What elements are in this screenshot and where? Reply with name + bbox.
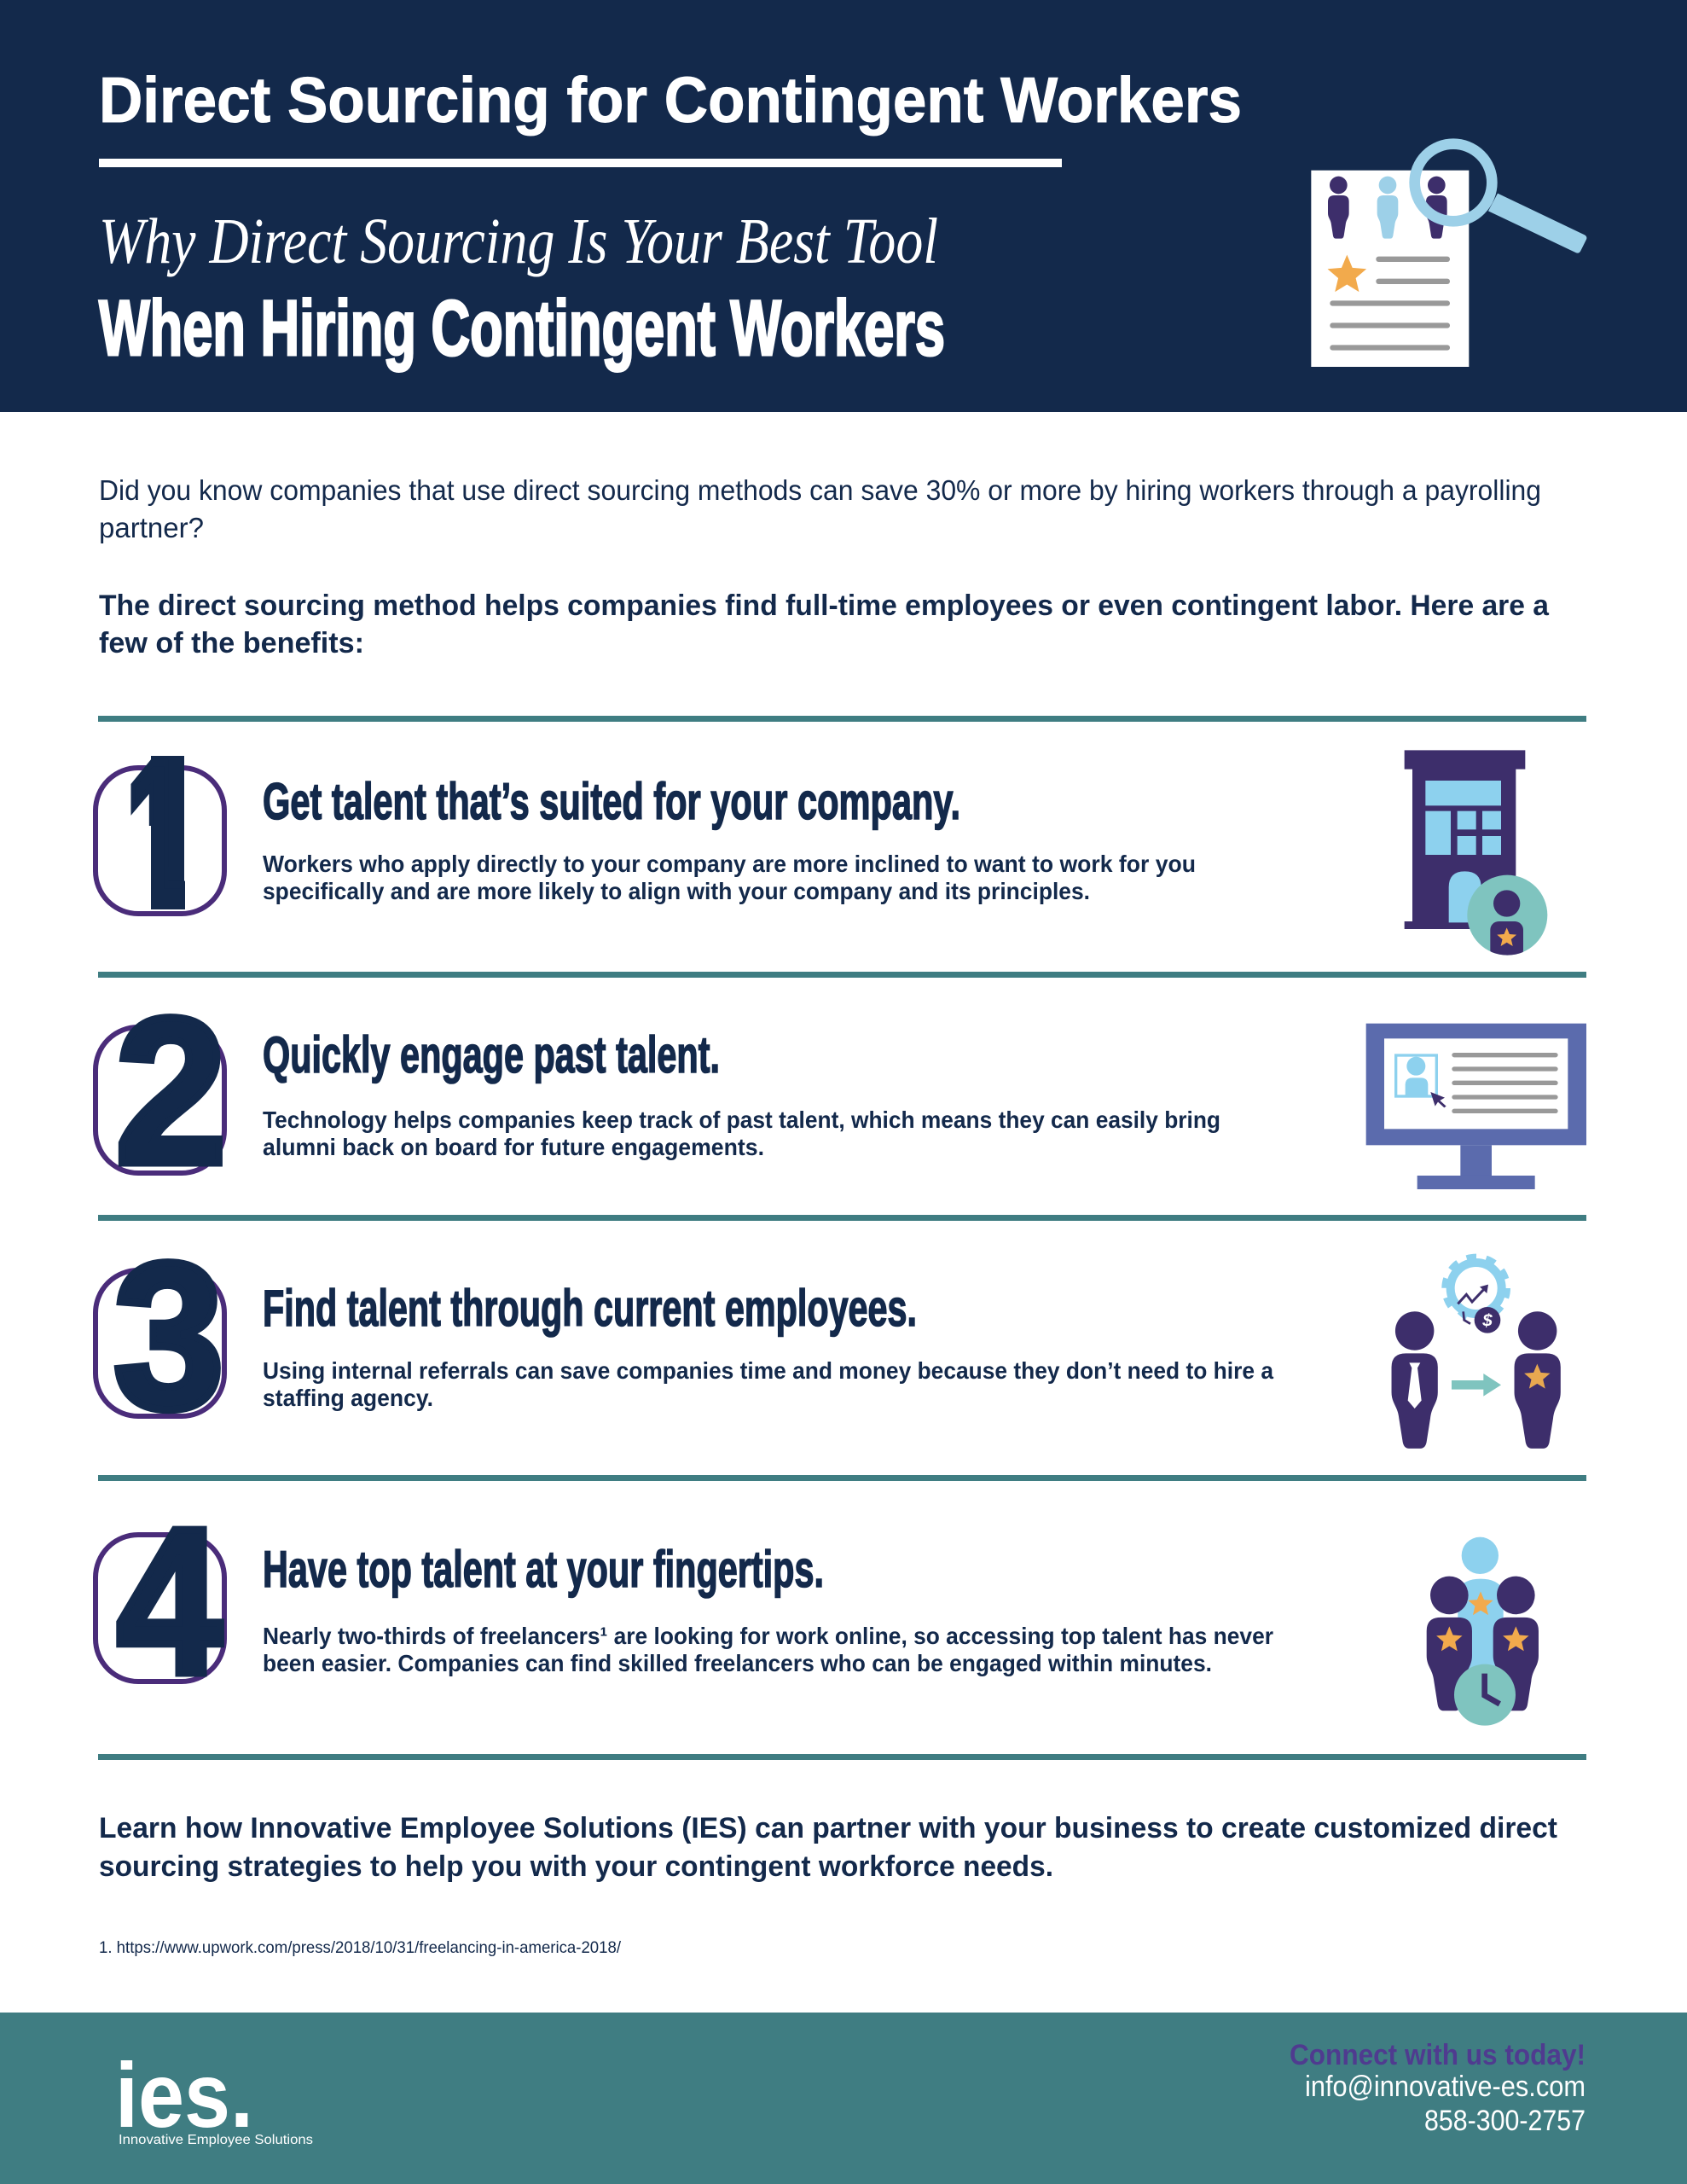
bold lead-in text: few of the benefits: — [99, 627, 364, 659]
intro text: partner? — [99, 512, 204, 543]
heading 2: Quickly engage past talent. — [263, 1026, 720, 1083]
logo: ies: ies. — [115, 2043, 253, 2146]
footnote: 1. https://www.upwork.com/press/2018/10/31/freelancing-in-america-2018/ — [99, 1939, 622, 1957]
title: Direct Sourcing for Contingent Workers — [99, 64, 1242, 136]
body 2: Technology helps companies keep track of past talent, which means they can easily bring — [263, 1107, 1220, 1133]
icon: resume with magnifying glass — [1311, 144, 1586, 367]
icon: computer monitor with profile — [1366, 1024, 1586, 1189]
contact details: info@innovative-es.com — [1305, 2071, 1586, 2103]
panel: benefit 4 — [96, 1484, 1539, 1726]
subtitle: bold line: When Hiring Contingent Workers — [99, 285, 945, 372]
icon: employee referral: $ — [1481, 1311, 1493, 1331]
body 4: Nearly two-thirds of freelancers¹ are looking for work online, so accessing top talent has never — [263, 1623, 1273, 1649]
body 3 — [263, 1357, 1273, 1411]
number badge 4: 4 — [117, 1484, 222, 1717]
body 3: staffing agency. — [263, 1385, 433, 1411]
panel: benefit 1 — [93, 750, 1547, 956]
body 4: been easier. Companies can find skilled freelancers who can be engaged within minutes. — [263, 1650, 1212, 1676]
number badge 3: 3 — [113, 1219, 224, 1452]
subtitle: script line: Why Direct Sourcing Is Your Best Tool — [99, 206, 938, 277]
logo: ies: Innovative Employee Solutions — [119, 2133, 313, 2147]
number badge 2: 2 — [115, 974, 227, 1207]
body 1: Workers who apply directly to your company are more inclined to want to work for you — [263, 851, 1196, 877]
heading 1: Get talent that’s suited for your company. — [263, 773, 960, 830]
heading 3: Find talent through current employees. — [263, 1280, 917, 1337]
body 1 — [263, 851, 1196, 904]
icon: employee referral — [1392, 1257, 1561, 1449]
call to action text: Learn how Innovative Employee Solutions (IES) can partner with your business to create customized direct — [99, 1812, 1557, 1844]
bold lead-in text — [99, 590, 1550, 659]
icon: team with clock — [1427, 1537, 1539, 1726]
number badge 1: 1 — [125, 717, 187, 950]
body 1: specifically and are more likely to align with your company and its principles. — [263, 878, 1090, 904]
number badge 1 — [93, 756, 227, 916]
body 4 — [263, 1623, 1273, 1676]
body 2 — [263, 1107, 1220, 1160]
contact details: Connect with us today! — [1290, 2039, 1586, 2071]
icon: office building with person — [1405, 750, 1547, 958]
contact details: 858-300-2757 — [1424, 2105, 1586, 2137]
intro text: Did you know companies that use direct sourcing methods can save 30% or more by hiring workers through a payrolling — [99, 474, 1541, 506]
call to action text — [99, 1812, 1557, 1883]
call to action text: sourcing strategies to help you with your contingent workforce needs. — [99, 1850, 1053, 1883]
panel: footer — [0, 2013, 1687, 2184]
panel: benefit 3 — [96, 1219, 1561, 1452]
contact details — [1290, 2039, 1586, 2137]
body 3: Using internal referrals can save companies time and money because they don’t need to hire a — [263, 1357, 1273, 1384]
heading 4: Have top talent at your fingertips. — [263, 1541, 824, 1598]
bold lead-in text: The direct sourcing method helps companies find full-time employees or even contingent labor. Here are a — [99, 590, 1550, 622]
panel: header banner — [0, 0, 1687, 412]
intro text — [99, 474, 1541, 543]
body 2: alumni back on board for future engagements. — [263, 1134, 764, 1160]
panel: benefit 2 — [96, 974, 1586, 1207]
